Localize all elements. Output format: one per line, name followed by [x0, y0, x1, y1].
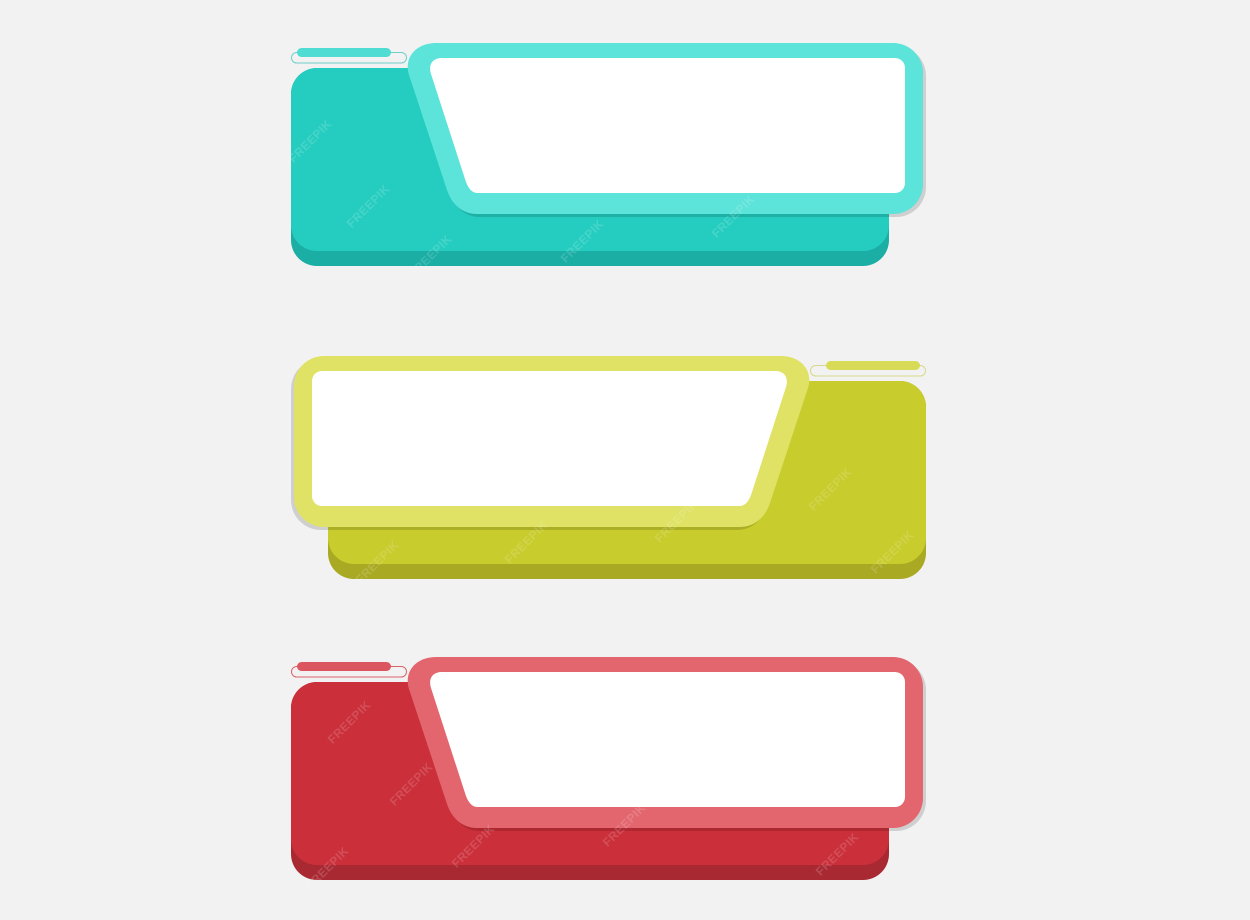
watermarks: FREEPIK	[813, 830, 862, 879]
watermarks	[286, 117, 917, 893]
pill outline: teal	[292, 52, 406, 63]
panel: yellow banner	[291, 356, 926, 579]
base: yellow face	[328, 381, 926, 564]
watermarks: FREEPIK	[286, 117, 335, 166]
frame shadow: teal	[411, 46, 926, 217]
watermarks: FREEPIK	[558, 217, 607, 266]
panel: teal banner	[291, 43, 926, 266]
frame shadow: yellow	[291, 359, 806, 530]
panel: red banner	[291, 657, 926, 880]
watermarks: FREEPIK	[652, 497, 701, 546]
pill: red	[297, 662, 391, 671]
frame: teal	[408, 43, 923, 214]
text box: yellow	[312, 371, 787, 506]
watermarks: FREEPIK	[387, 760, 436, 809]
pill: teal	[297, 48, 391, 57]
watermarks: FREEPIK	[806, 465, 855, 514]
base: teal lower edge	[291, 68, 889, 266]
watermarks: FREEPIK	[868, 528, 917, 577]
frame: yellow	[294, 356, 809, 527]
frame shadow: red	[411, 660, 926, 831]
watermarks: FREEPIK	[353, 538, 402, 587]
watermarks: FREEPIK	[406, 232, 455, 281]
text box: teal	[430, 58, 905, 193]
pill: yellow	[826, 361, 920, 370]
watermarks: FREEPIK	[325, 698, 374, 747]
base: red lower edge	[291, 682, 889, 880]
watermarks: FREEPIK	[344, 182, 393, 231]
watermarks: FREEPIK	[709, 192, 758, 241]
base: yellow lower edge	[328, 381, 926, 579]
watermarks: FREEPIK	[449, 822, 498, 871]
base: teal face	[291, 68, 889, 251]
text box: red	[430, 672, 905, 807]
watermarks: FREEPIK	[600, 801, 649, 850]
frame: red	[408, 657, 923, 828]
watermarks: FREEPIK	[303, 844, 352, 893]
watermarks: FREEPIK	[502, 518, 551, 567]
pill outline: yellow	[810, 366, 926, 376]
base: red face	[291, 682, 889, 865]
pill outline: red	[292, 666, 406, 677]
